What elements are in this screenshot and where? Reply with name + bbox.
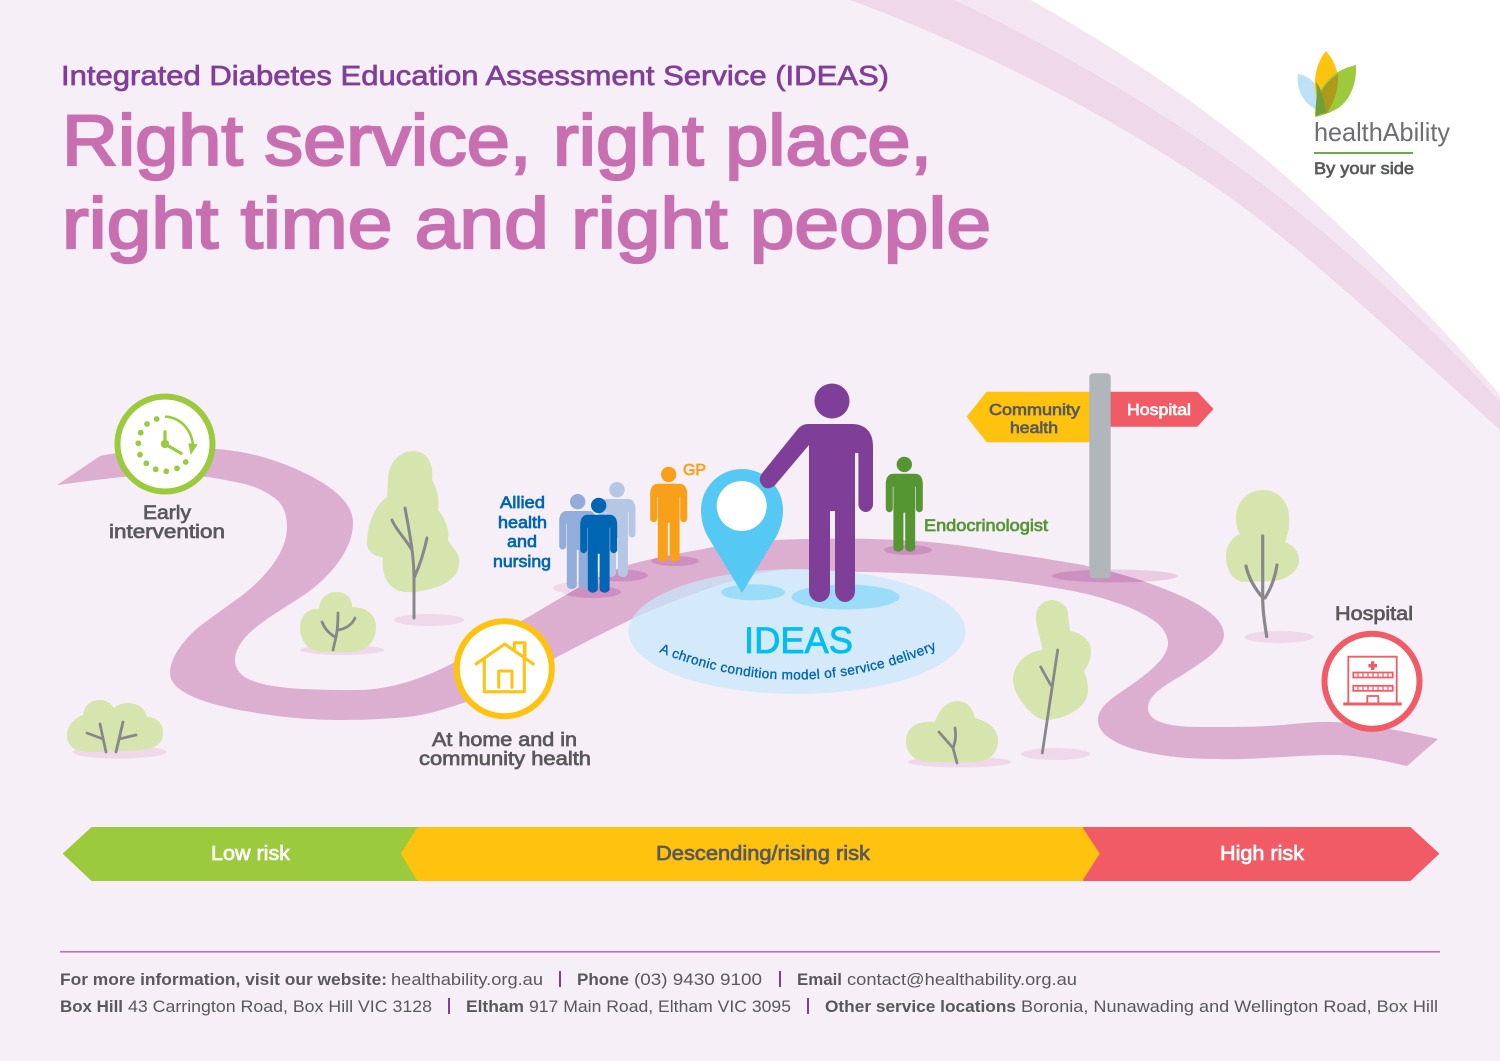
title: right time and right people [62,185,991,264]
tree: centre right [1013,600,1091,760]
pin shadow [721,584,785,600]
figure: central person [760,384,873,602]
footer contact line: Email [797,970,842,989]
person shadow [792,584,900,610]
logo tagline: By your side [1314,159,1414,178]
footer contact line: healthability.org.au [391,970,543,989]
IDEAS label: IDEAS [744,620,853,661]
label: at home and in community health [419,730,591,770]
footer locations line: Other service locations [825,997,1016,1016]
post [1089,373,1111,578]
footer contact line: Phone [577,970,629,989]
sign: community health [968,392,1090,442]
icon: location pin [701,469,783,593]
icon: clock circle [118,396,212,492]
footer rule [60,951,1440,953]
label: allied health and nursing [493,494,551,571]
signpost [968,373,1212,578]
sign: hospital: Hospital [1127,402,1191,419]
footer contact line [60,970,1077,989]
footer contact line: contact@healthability.org.au [847,970,1077,989]
figure: endocrinologist [886,457,923,552]
title [62,102,991,264]
high risk segment: High risk [1220,843,1305,865]
tree: right upper [1226,490,1314,643]
label: GP: GP [683,462,706,479]
footer locations line: 43 Carrington Road, Box Hill VIC 3128 [128,997,432,1016]
icon: house circle [457,621,552,716]
winding road [57,448,1438,766]
label: at home and in community health: community health [419,749,591,770]
descending rising risk segment: Descending/rising risk [656,843,871,865]
icon: leaves [1298,51,1356,117]
title: Right service, right place, [62,102,932,181]
footer locations line: Box Hill [60,997,123,1016]
sign: hospital [1105,392,1212,426]
footer locations line: Boronia, Nunawading and Wellington Road, Box Hill [1021,997,1438,1016]
risk bar [64,828,1438,880]
figure: allied health group [559,482,636,593]
label: allied health and nursing: and [507,533,537,551]
footer locations line: Eltham [466,997,524,1016]
figure: GP [650,467,687,562]
bush: bottom centre [906,701,1011,768]
footer locations line [60,997,1438,1016]
low risk segment: Low risk [211,843,291,865]
label: early intervention: intervention [109,522,225,543]
ground shadows off the road [553,545,1178,598]
label: early intervention [109,503,225,543]
label: allied health and nursing: nursing [493,553,551,571]
ground shadows on the road [553,545,1178,598]
footer locations line: 917 Main Road, Eltham VIC 3095 [529,997,791,1016]
bush: centre left [300,592,384,655]
icon: hospital circle [1324,634,1420,729]
high risk segment [1084,828,1438,880]
label: hospital: Hospital [1335,604,1413,625]
label: allied health and nursing: Allied [500,494,545,512]
descending rising risk segment [402,828,1100,880]
tree: left large [367,451,464,626]
low risk segment [64,828,418,880]
label: early intervention: Early [143,503,192,524]
curved caption: A chronic condition model of service delivery [658,642,934,680]
logo: healthAbility [1298,51,1450,178]
sign: community health: Community [989,402,1080,419]
label: allied health and nursing: health [498,514,547,532]
corner swoosh bands [850,0,1500,430]
footer contact line: (03) 9430 9100 [634,970,762,989]
sign: community health: health [1010,420,1058,437]
logo wordmark: healthAbility [1314,117,1450,147]
subtitle: Integrated Diabetes Education Assessment Service (IDEAS) [61,60,889,91]
label: at home and in community health: At home and in [432,730,577,751]
footer contact line: For more information, visit our website: [60,970,387,989]
IDEAS disc [628,569,966,694]
label: endocrinologist: Endocrinologist [924,517,1048,535]
bush: bottom left [67,700,166,758]
